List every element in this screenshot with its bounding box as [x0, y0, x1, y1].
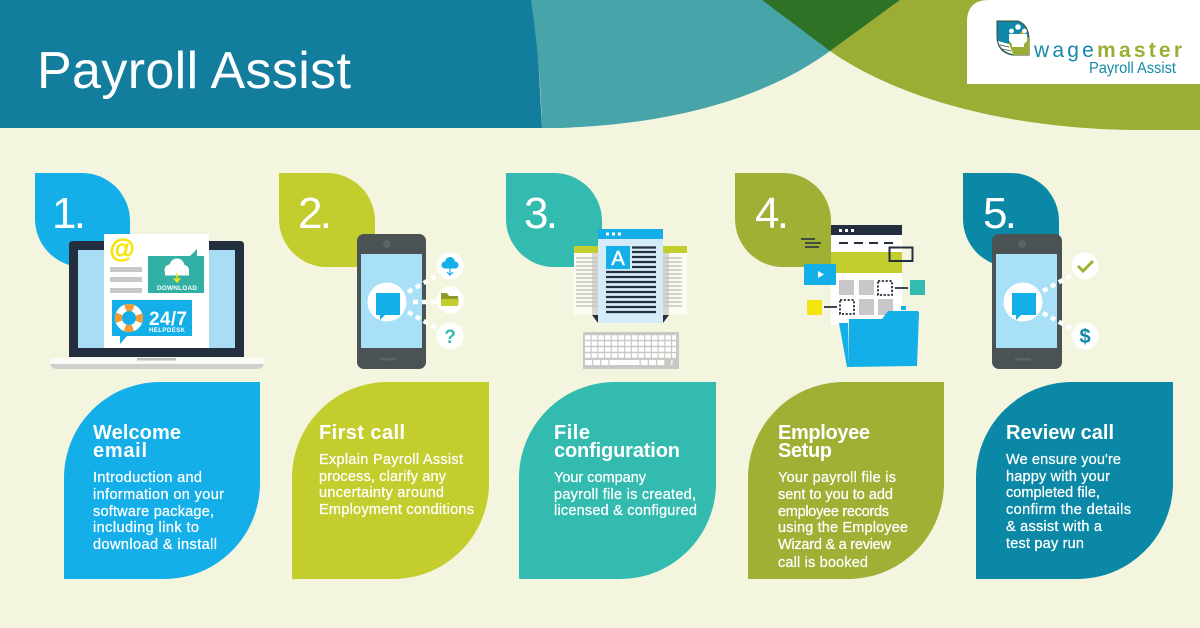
- logo subtitle: Payroll Assist: [1089, 60, 1177, 77]
- number leaf 2: [279, 173, 375, 267]
- body text: happy with your: [1006, 469, 1110, 485]
- body text: uncertainty around: [319, 485, 444, 501]
- body text: We ensure you're: [1006, 452, 1121, 468]
- cloud download bubble: [436, 252, 464, 280]
- heading: configuration: [554, 440, 680, 462]
- body text: test pay run: [1006, 536, 1084, 552]
- icon: documents and keyboard: [574, 229, 687, 369]
- helpdesk card: 24/7: [149, 309, 187, 330]
- icon: web layout and folder: [801, 225, 925, 367]
- body text: Your company: [554, 470, 647, 486]
- number leaf 4: 4.: [755, 189, 789, 238]
- number leaf 5: 5.: [983, 189, 1017, 238]
- heading: Setup: [778, 440, 832, 462]
- body text: [778, 470, 908, 571]
- heading: Welcome: [93, 422, 181, 444]
- heading: email: [93, 440, 147, 462]
- number leaf 2: 2.: [298, 189, 332, 238]
- number leaf 1: [35, 173, 130, 267]
- heading: Employee: [778, 422, 870, 444]
- body text: [319, 452, 474, 518]
- body text: call is booked: [778, 555, 868, 571]
- title: Payroll Assist: [37, 42, 352, 100]
- logo icon: [997, 21, 1029, 55]
- folder: [839, 306, 919, 367]
- panel: review call: [976, 382, 1173, 579]
- heading: [554, 422, 680, 462]
- body text: [1006, 452, 1131, 552]
- keyboard: [583, 332, 679, 369]
- panel: welcome email: [64, 382, 260, 579]
- panel: employee setup: [748, 382, 944, 579]
- body text: software package,: [93, 504, 214, 520]
- body text: [93, 470, 224, 553]
- wordmark: wagemaster: [1033, 39, 1182, 62]
- body text: download & install: [93, 537, 217, 553]
- question bubble: ?: [444, 327, 456, 348]
- body text: licensed & configured: [554, 503, 697, 519]
- number leaf 5: [963, 173, 1059, 267]
- logo: [967, 0, 1200, 84]
- number leaf 1: 1.: [52, 189, 86, 238]
- body text: [554, 470, 697, 519]
- icon: laptop with email, download and helpdesk: [50, 233, 264, 369]
- at sign: @: [109, 233, 135, 263]
- body text: & assist with a: [1006, 519, 1103, 535]
- download card: DOWNLOAD: [157, 285, 197, 292]
- body text: completed file,: [1006, 485, 1100, 501]
- icon: phone with cloud, folder and question: [357, 234, 464, 369]
- number leaf 4: [735, 173, 831, 267]
- body text: process, clarify any: [319, 469, 447, 485]
- folder bubble: [436, 286, 464, 314]
- panel: first call: [292, 382, 489, 579]
- check bubble: [1072, 252, 1098, 280]
- helpdesk card: [112, 300, 192, 344]
- body text: Introduction and: [93, 470, 202, 486]
- body text: including link to: [93, 520, 199, 536]
- play button: [804, 264, 836, 285]
- body text: information on your: [93, 487, 224, 503]
- panel: file configuration: [519, 382, 716, 579]
- body text: using the Employee: [778, 520, 908, 536]
- body text: Wizard & a review: [778, 537, 892, 553]
- heading: Review call: [1006, 422, 1114, 444]
- number leaf 3: [506, 173, 602, 267]
- header band: [0, 0, 1200, 130]
- icon: phone with check and dollar: [992, 234, 1098, 369]
- download card: [148, 249, 204, 293]
- number leaf 3: 3.: [524, 189, 558, 238]
- body text: sent to you to add: [778, 487, 893, 503]
- main page: A: [611, 248, 625, 270]
- body text: confirm the details: [1006, 502, 1131, 518]
- side pages: [574, 246, 687, 323]
- body text: Employment conditions: [319, 502, 474, 518]
- helpdesk card: HELPDESK: [149, 327, 186, 334]
- body text: Explain Payroll Assist: [319, 452, 463, 468]
- heading: [93, 422, 181, 462]
- heading: First call: [319, 422, 405, 444]
- body text: Your payroll file is: [778, 470, 896, 486]
- body text: employee records: [778, 504, 889, 520]
- dollar bubble: $: [1079, 326, 1091, 348]
- heading: [778, 422, 870, 462]
- body text: payroll file is created,: [554, 487, 696, 503]
- heading: File: [554, 422, 590, 444]
